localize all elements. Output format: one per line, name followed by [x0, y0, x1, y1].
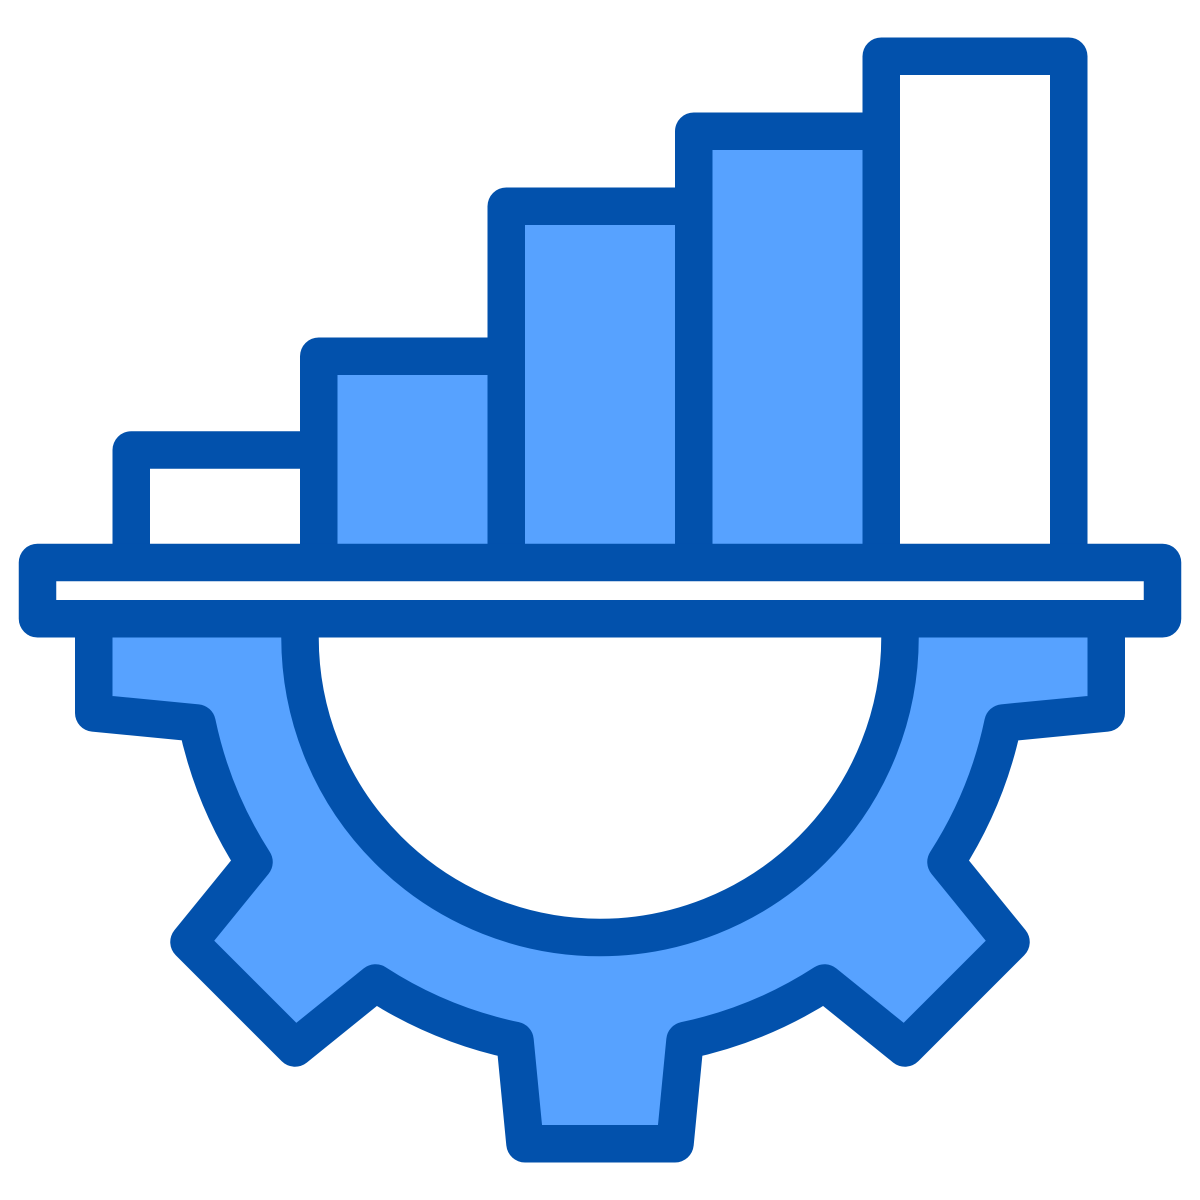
gear centre semicircle [300, 618, 900, 938]
shelf baseline [38, 562, 1162, 619]
bar 4 [694, 131, 881, 570]
bar 2 [319, 356, 506, 570]
bar 3 [506, 206, 694, 570]
bar 1 [131, 450, 319, 570]
gear [94, 618, 1106, 1144]
bar 5 [881, 56, 1069, 570]
bar chart [131, 56, 1069, 570]
